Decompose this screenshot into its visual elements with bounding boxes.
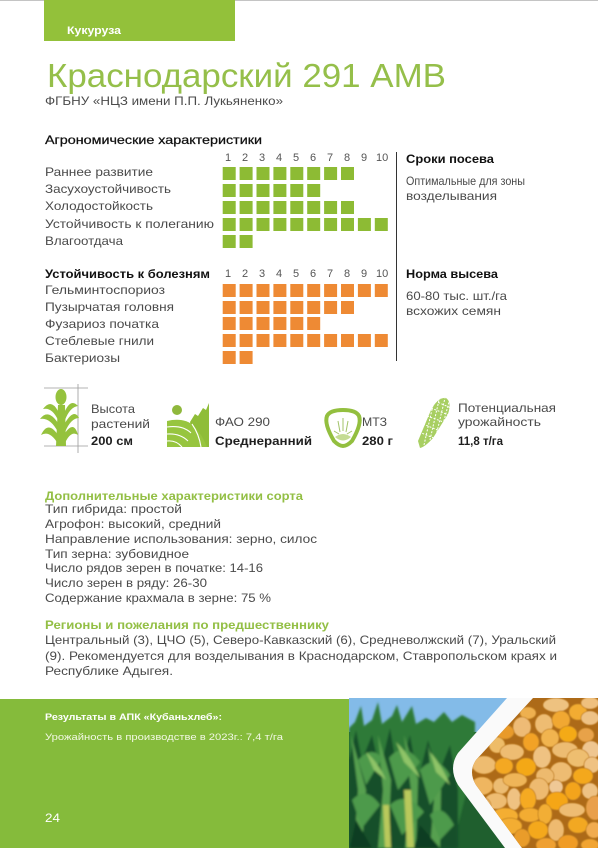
scale numbers: 10 bbox=[376, 152, 388, 164]
panel: sowing dates: Сроки посева bbox=[406, 152, 494, 166]
scale numbers: 3 bbox=[259, 152, 265, 164]
label: FAO bbox=[215, 415, 312, 448]
row labels: Холодостойкость bbox=[45, 199, 153, 213]
panel: regions and recommendations: Центральный (3), ЦЧО (5), Северо-Кавказский (6), Средневолжский (7), Уральский bbox=[45, 633, 556, 647]
scale numbers: 4 bbox=[276, 152, 282, 164]
scale numbers: 4 bbox=[276, 268, 282, 280]
kernels bbox=[460, 697, 598, 848]
scale numbers: 2 bbox=[242, 268, 248, 280]
label: plant height: 200 см bbox=[91, 434, 133, 448]
label: thousand kernel weight: МТЗ bbox=[362, 415, 387, 429]
scale numbers: 8 bbox=[344, 268, 350, 280]
label: FAO: Среднеранний bbox=[215, 434, 312, 448]
label: thousand kernel weight bbox=[362, 415, 393, 448]
icon: corn cob bbox=[418, 398, 451, 448]
panel: additional characteristics bbox=[45, 489, 317, 605]
panel: seeding rate: 60-80 тыс. шт./га bbox=[406, 289, 507, 303]
icon: kernel bbox=[326, 410, 360, 446]
label: FAO: ФАО 290 bbox=[215, 415, 270, 429]
category tab bbox=[44, 0, 235, 41]
scale numbers: 9 bbox=[361, 268, 367, 280]
panel: additional characteristics: Содержание крахмала в зерне: 75 % bbox=[45, 591, 271, 605]
subtitle: ФГБНУ «НЦЗ имени П.П. Лукьяненко» bbox=[45, 94, 283, 108]
row labels: Пузырчатая головня bbox=[45, 300, 174, 314]
row labels: Влагоотдача bbox=[45, 234, 123, 248]
category tab: Кукуруза bbox=[67, 25, 122, 37]
row labels: Стеблевые гнили bbox=[45, 334, 154, 348]
panel: regions and recommendations: (9). Рекомендуется для возделывания в Краснодарском, Ставропольском краях и bbox=[45, 649, 557, 663]
scale numbers: 7 bbox=[327, 152, 333, 164]
scale numbers: 5 bbox=[293, 152, 299, 164]
panel: seeding rate bbox=[406, 267, 507, 318]
panel: regions and recommendations: Республике Адыгея. bbox=[45, 664, 173, 678]
heading: disease resistance: Устойчивость к болезням bbox=[45, 267, 210, 281]
scale numbers: 6 bbox=[310, 268, 316, 280]
scale numbers: 1 bbox=[225, 268, 231, 280]
panel: footer results: Урожайность в производстве в 2023г.: 7,4 т/га bbox=[45, 732, 284, 743]
scale numbers bbox=[225, 152, 388, 164]
panel: disease resistance bbox=[45, 267, 388, 365]
scale numbers: 10 bbox=[376, 268, 388, 280]
scale numbers: 7 bbox=[327, 268, 333, 280]
label: potential yield: Потенциальная bbox=[458, 401, 556, 415]
orange score squares bbox=[223, 284, 388, 364]
panel: footer results: Результаты в АПК «Кубаньхлеб»: bbox=[45, 712, 222, 723]
scale numbers: 8 bbox=[344, 152, 350, 164]
panel: seeding rate: Норма высева bbox=[406, 267, 498, 281]
panel: regions and recommendations: Регионы и пожелания по предшественнику bbox=[45, 618, 329, 632]
green score squares bbox=[223, 167, 388, 248]
corn field foliage bbox=[349, 702, 475, 848]
scale numbers: 2 bbox=[242, 152, 248, 164]
panel: additional characteristics: Направление использования: зерно, силос bbox=[45, 532, 317, 546]
label: potential yield: урожайность bbox=[458, 415, 541, 429]
row labels bbox=[45, 283, 174, 365]
panel: additional characteristics: Агрофон: высокий, средний bbox=[45, 517, 221, 531]
label: plant height bbox=[91, 402, 150, 448]
label: potential yield: 11,8 т/га bbox=[458, 434, 503, 448]
panel: additional characteristics: Тип гибрида: простой bbox=[45, 502, 182, 516]
row labels: Гельминтоспориоз bbox=[45, 283, 166, 297]
photo: corn field and kernels bbox=[349, 697, 598, 848]
scale numbers: 1 bbox=[225, 152, 231, 164]
icon: field bbox=[167, 403, 209, 447]
row labels bbox=[45, 165, 214, 248]
panel: seeding rate: всхожих семян bbox=[406, 304, 501, 318]
label: potential yield bbox=[458, 401, 556, 448]
scale numbers: 9 bbox=[361, 152, 367, 164]
icon: corn plant height bbox=[40, 384, 88, 453]
row labels: Устойчивость к полеганию bbox=[45, 217, 214, 231]
heading: agronomic: Агрономические характеристики bbox=[45, 133, 262, 147]
row labels: Фузариоз початка bbox=[45, 317, 159, 331]
panel: additional characteristics: Число рядов зерен в початке: 14-16 bbox=[45, 561, 263, 575]
scale numbers: 3 bbox=[259, 268, 265, 280]
panel: sowing dates: возделывания bbox=[406, 189, 497, 203]
label: plant height: растений bbox=[91, 417, 150, 431]
scale numbers bbox=[225, 268, 388, 280]
panel: footer results bbox=[0, 699, 349, 848]
panel: footer results: 24 bbox=[45, 811, 60, 825]
label: plant height: Высота bbox=[91, 402, 135, 416]
scale numbers: 5 bbox=[293, 268, 299, 280]
panel: additional characteristics: Число зерен в ряду: 26-30 bbox=[45, 576, 207, 590]
title: Краснодарский 291 АМВ bbox=[47, 57, 446, 94]
row labels: Засухоустойчивость bbox=[45, 182, 171, 196]
panel: agronomic characteristics bbox=[45, 133, 388, 248]
panel: additional characteristics: Тип зерна: зубовидное bbox=[45, 547, 189, 561]
panel: regions and recommendations bbox=[45, 618, 557, 678]
label: thousand kernel weight: 280 г bbox=[362, 434, 393, 448]
panel: sowing dates: Оптимальные для зоны bbox=[406, 174, 525, 188]
scale numbers: 6 bbox=[310, 152, 316, 164]
panel: additional characteristics: Дополнительные характеристики сорта bbox=[45, 489, 303, 503]
row labels: Бактериозы bbox=[45, 351, 120, 365]
white dish rim bbox=[453, 698, 533, 848]
panel: sowing dates bbox=[406, 152, 525, 203]
row labels: Раннее развитие bbox=[45, 165, 153, 179]
